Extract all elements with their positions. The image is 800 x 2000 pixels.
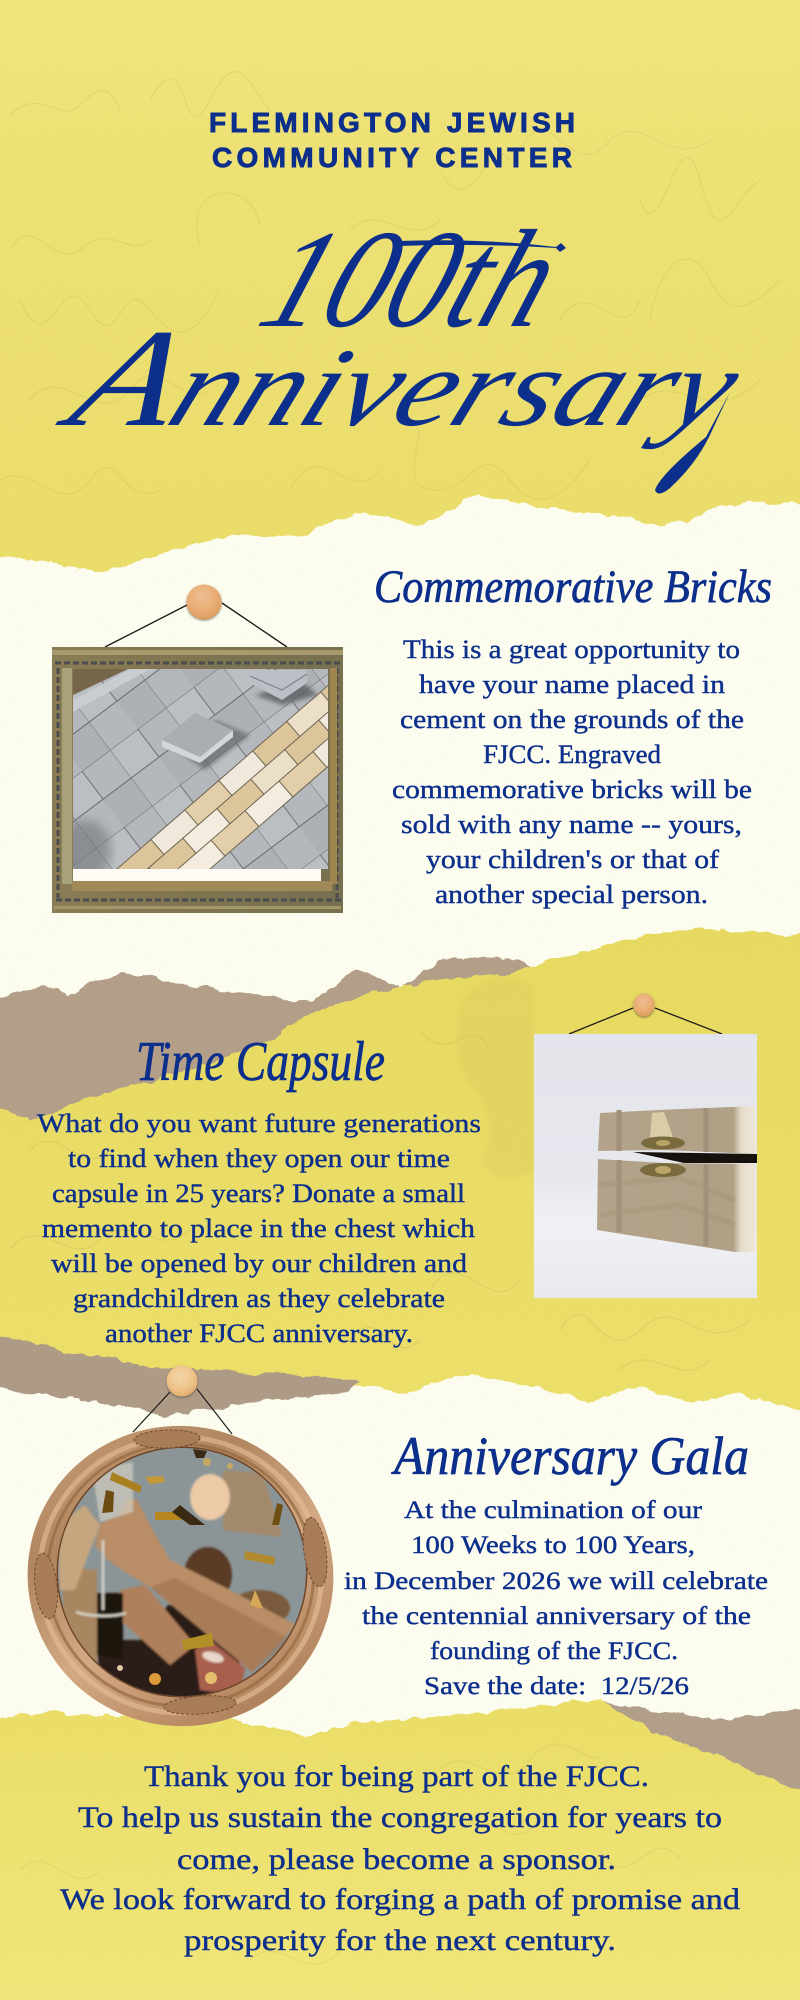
hanging wire: [105, 603, 287, 647]
text block: gala description: the centennial anniversary of the: [362, 1603, 751, 1630]
photo backdrop: [534, 1034, 757, 1298]
text block: closing thank-you message: come, please become a sponsor.: [177, 1843, 616, 1876]
torn paper: middle yellow band: [0, 927, 800, 1420]
background guests: [184, 1546, 234, 1590]
text block: closing thank-you message: [60, 1760, 740, 1957]
guest face: [195, 1640, 245, 1695]
text block: bricks description: sold with any name -- yours,: [401, 810, 742, 839]
chest lid: [598, 1106, 757, 1154]
faint handwriting texture: header: [0, 71, 780, 499]
text block: bricks description: your children's or that of: [426, 845, 719, 874]
heading: Time Capsule: Time Capsule: [136, 1031, 385, 1093]
torn paper: brown kraft strip, left of middle band: [0, 957, 560, 1125]
torn paper: bottom yellow footer: [0, 1698, 800, 2000]
framed oval photo: gala toast with confetti: [28, 1365, 334, 1726]
raised arm: [95, 1498, 296, 1672]
champagne glass: [92, 1462, 133, 1522]
text block: bricks description: FJCC. Engraved: [483, 740, 661, 769]
script heading: 100th Anniversary: [42, 201, 770, 494]
hanging photo: wooden time capsule chest: [534, 994, 757, 1298]
faint handwriting texture: footer: [20, 1744, 680, 1964]
torn paper: brown kraft strip, lower left: [0, 1330, 360, 1416]
text block: time capsule description: capsule in 25 years? Donate a small: [52, 1179, 465, 1208]
text block: gala description: [344, 1497, 768, 1700]
text block: bricks description: another special person.: [435, 880, 708, 909]
text block: bricks description: have your name placed in: [419, 670, 725, 699]
text block: time capsule description: [37, 1109, 481, 1348]
text block: time capsule description: What do you want future generations: [37, 1109, 481, 1138]
icon: brass pin: [634, 994, 654, 1016]
text block: time capsule description: grandchildren as they celebrate: [73, 1284, 445, 1313]
text block: closing thank-you message: prosperity for the next century.: [184, 1924, 616, 1957]
text block: closing thank-you message: To help us sustain the congregation for years to: [78, 1801, 722, 1834]
organisation title: [209, 107, 575, 173]
faint ornament and handwriting: middle band: [10, 1030, 750, 1370]
icon: brass pin: [186, 584, 222, 620]
left hand: [58, 1505, 100, 1590]
text block: time capsule description: will be opened by our children and: [51, 1249, 467, 1278]
gold confetti: [110, 1472, 142, 1493]
script heading: 100th Anniversary: 100th: [243, 201, 580, 357]
text block: gala description: founding of the FJCC.: [430, 1638, 678, 1665]
text block: closing thank-you message: We look forward to forging a path of promise and: [60, 1883, 740, 1916]
tan paver path: [116, 685, 328, 869]
torn paper: brown kraft strip, lower right: [590, 1700, 800, 1820]
hanging wire: [569, 1008, 722, 1034]
ornate picture frame: [52, 647, 343, 913]
text block: bricks description: commemorative bricks will be: [392, 775, 752, 804]
brass clasps: [650, 1112, 673, 1137]
text block: gala description: 100 Weeks to 100 Years,: [411, 1532, 695, 1559]
text block: gala description: in December 2026 we will celebrate: [344, 1568, 768, 1595]
white mat strip: [73, 869, 321, 881]
loose slab and shadow: [170, 720, 250, 770]
text block: time capsule description: to find when they open our time: [68, 1144, 450, 1173]
brick paving photo: [73, 669, 328, 869]
chest opening: [633, 1152, 757, 1163]
script heading: 100th Anniversary: Anniversary: [42, 300, 770, 455]
chest body: [597, 1159, 757, 1252]
text block: time capsule description: another FJCC anniversary.: [105, 1319, 413, 1348]
text block: bricks description: This is a great opportunity to: [403, 635, 740, 664]
text block: gala description: Save the date: 12/5/26: [424, 1673, 689, 1700]
torn paper: top yellow header: [0, 0, 800, 573]
text block: gala description: At the culmination of our: [404, 1497, 703, 1524]
bronze oval frame: [0, 1397, 361, 1755]
organisation title: FLEMINGTON JEWISH: [209, 107, 575, 138]
organisation title: COMMUNITY CENTER: [212, 142, 572, 173]
party photo: [58, 1448, 306, 1696]
text block: bricks description: [392, 635, 752, 909]
text block: bricks description: cement on the grounds of the: [400, 705, 744, 734]
hanging wire: [133, 1389, 232, 1434]
framed photo: commemorative bricks: [52, 584, 343, 913]
lamp: [223, 1470, 282, 1537]
text block: closing thank-you message: Thank you for being part of the FJCC.: [144, 1760, 649, 1793]
heading: Anniversary Gala: Anniversary Gala: [391, 1426, 749, 1486]
icon: brass pin: [166, 1366, 198, 1396]
text block: time capsule description: memento to place in the chest which: [42, 1214, 475, 1243]
stacked slabs: [255, 680, 318, 705]
carved frame ornaments: [32, 1429, 331, 1716]
